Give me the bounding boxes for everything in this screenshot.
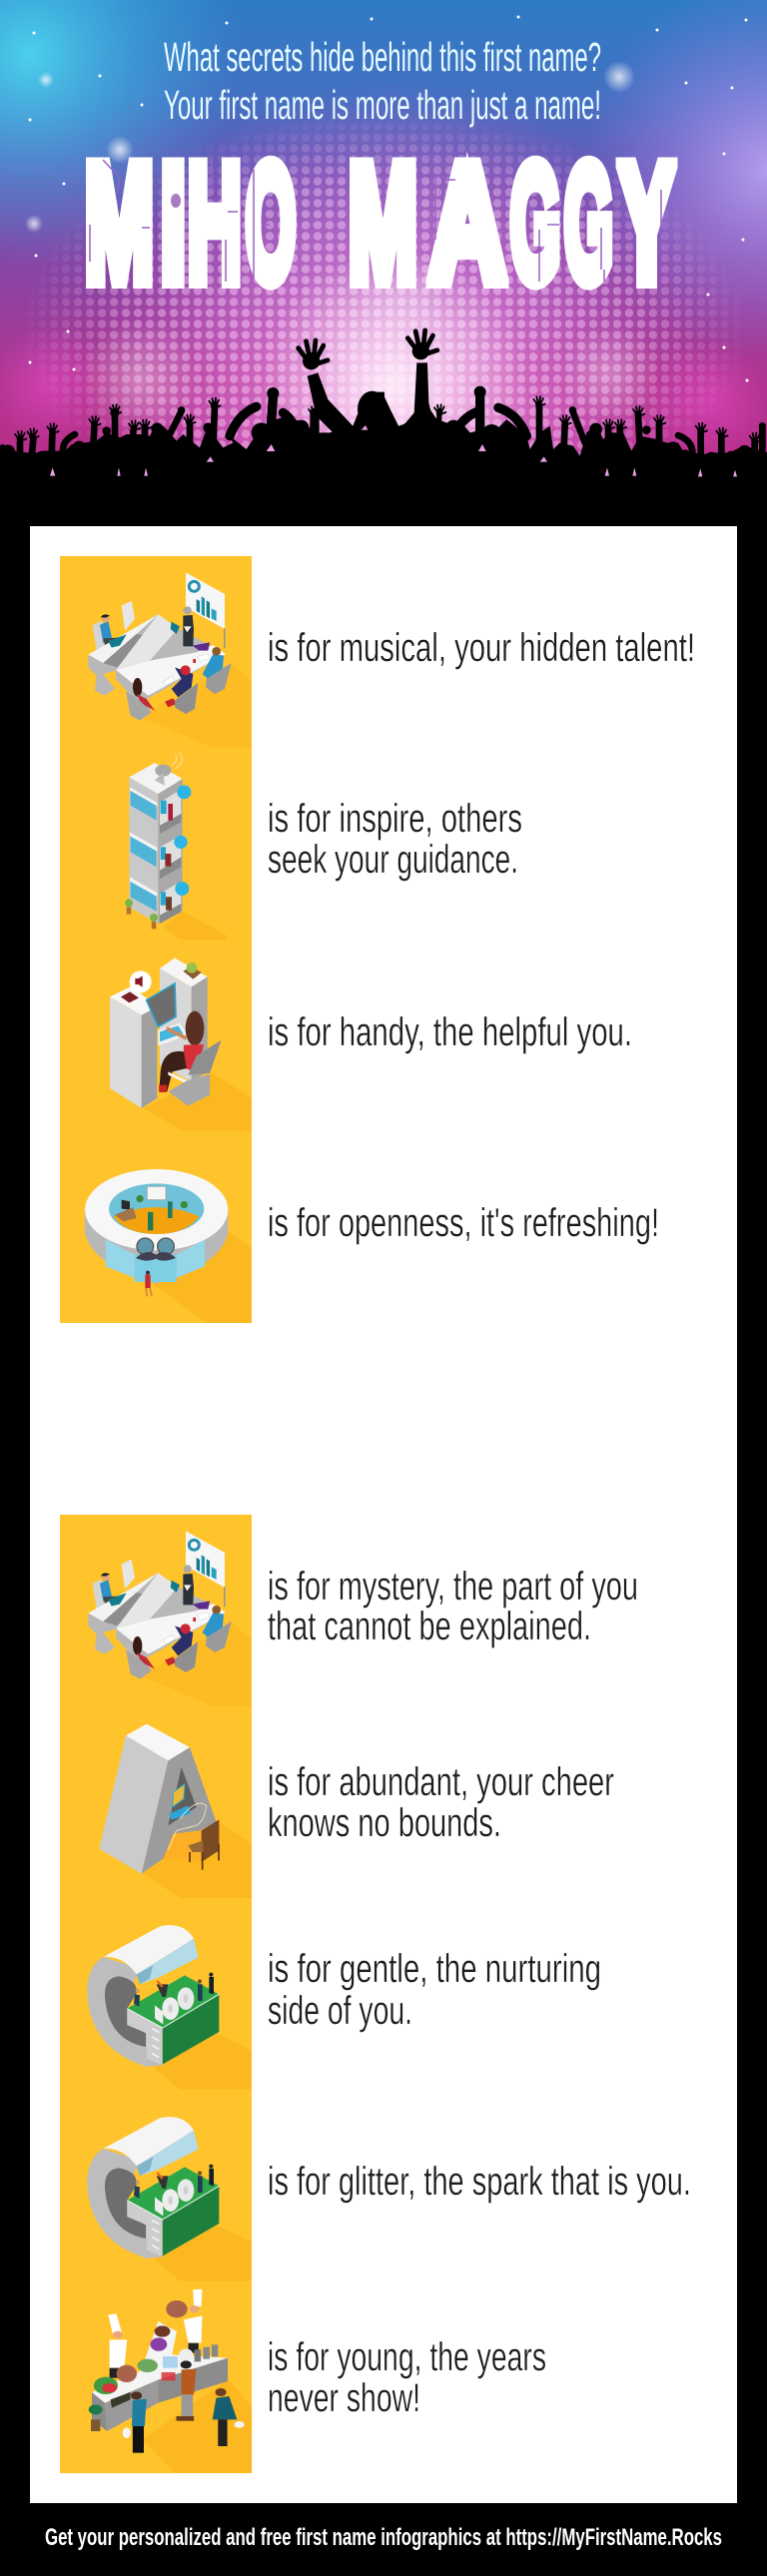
text: gentle: side of you. bbox=[268, 1989, 412, 2033]
text: gentle bbox=[268, 1947, 601, 2033]
text: young bbox=[268, 2335, 546, 2420]
title: names in distressed letters: M bbox=[85, 131, 154, 315]
row: A is for abundant bbox=[99, 1724, 614, 1898]
text: mystery bbox=[268, 1565, 638, 1648]
header tagline bbox=[164, 34, 601, 128]
text: young: never show! bbox=[268, 2376, 420, 2420]
text: inspire: seek your guidance. bbox=[268, 838, 518, 882]
title: names in distressed letters: M bbox=[349, 131, 417, 315]
text: inspire bbox=[268, 797, 522, 882]
icon: isometric G with green block bbox=[87, 1925, 252, 2090]
text: young: is for young, the years bbox=[268, 2335, 546, 2379]
panel: yellow illustration column, second name bbox=[60, 1515, 252, 2473]
text: abundant: knows no bounds. bbox=[268, 1801, 501, 1845]
text: mystery: is for mystery, the part of you bbox=[268, 1565, 638, 1609]
text: abundant: is for abundant, your cheer bbox=[268, 1760, 614, 1804]
icon: isometric I office tower bbox=[125, 752, 227, 940]
row: M is for musical bbox=[88, 572, 695, 748]
title: names in distressed letters: O bbox=[246, 131, 296, 315]
row: G is for gentle bbox=[87, 1925, 601, 2090]
title: names in distressed letters: G bbox=[510, 131, 560, 315]
row: Y is for young bbox=[89, 2289, 546, 2473]
text: gentle: is for gentle, the nurturing bbox=[268, 1947, 601, 1991]
title: names in distressed letters: Y bbox=[619, 131, 674, 315]
text: handy: is for handy, the helpful you. bbox=[268, 1010, 632, 1054]
icon: isometric Y food counter with chefs bbox=[89, 2289, 252, 2473]
row: O is for openness bbox=[85, 1169, 659, 1323]
row: G is for glitter bbox=[87, 2117, 691, 2281]
slits between bodies bbox=[478, 444, 737, 476]
row: M is for mystery bbox=[88, 1531, 638, 1706]
text: mystery: that cannot be explained. bbox=[268, 1605, 591, 1648]
panel: yellow illustration column, first name bbox=[60, 556, 252, 1323]
header background: concert stage lights bbox=[0, 0, 767, 455]
panel: white content card bbox=[30, 526, 737, 2503]
slits between bodies bbox=[50, 425, 368, 476]
row: I is for inspire bbox=[125, 752, 522, 940]
title: names in distressed letters: A bbox=[429, 131, 505, 315]
icon: isometric H desk with woman bbox=[110, 958, 252, 1131]
title: names in distressed letters: H bbox=[188, 131, 242, 315]
icon: isometric O optician shop bbox=[85, 1169, 252, 1323]
text: inspire: is for inspire, others bbox=[268, 797, 522, 841]
crowd silhouette bbox=[0, 330, 767, 529]
icon: isometric M meeting table bbox=[88, 1531, 252, 1706]
title: names in distressed letters bbox=[85, 131, 677, 315]
text: abundant bbox=[268, 1760, 614, 1845]
row: H is for handy bbox=[110, 958, 632, 1131]
icon: isometric A with desk and chair bbox=[99, 1724, 252, 1898]
title: names in distressed letters: G bbox=[564, 131, 613, 315]
icon: isometric M meeting table bbox=[88, 572, 252, 748]
title: names in distressed letters: I bbox=[161, 131, 186, 315]
icon: isometric G with green block bbox=[87, 2117, 252, 2281]
